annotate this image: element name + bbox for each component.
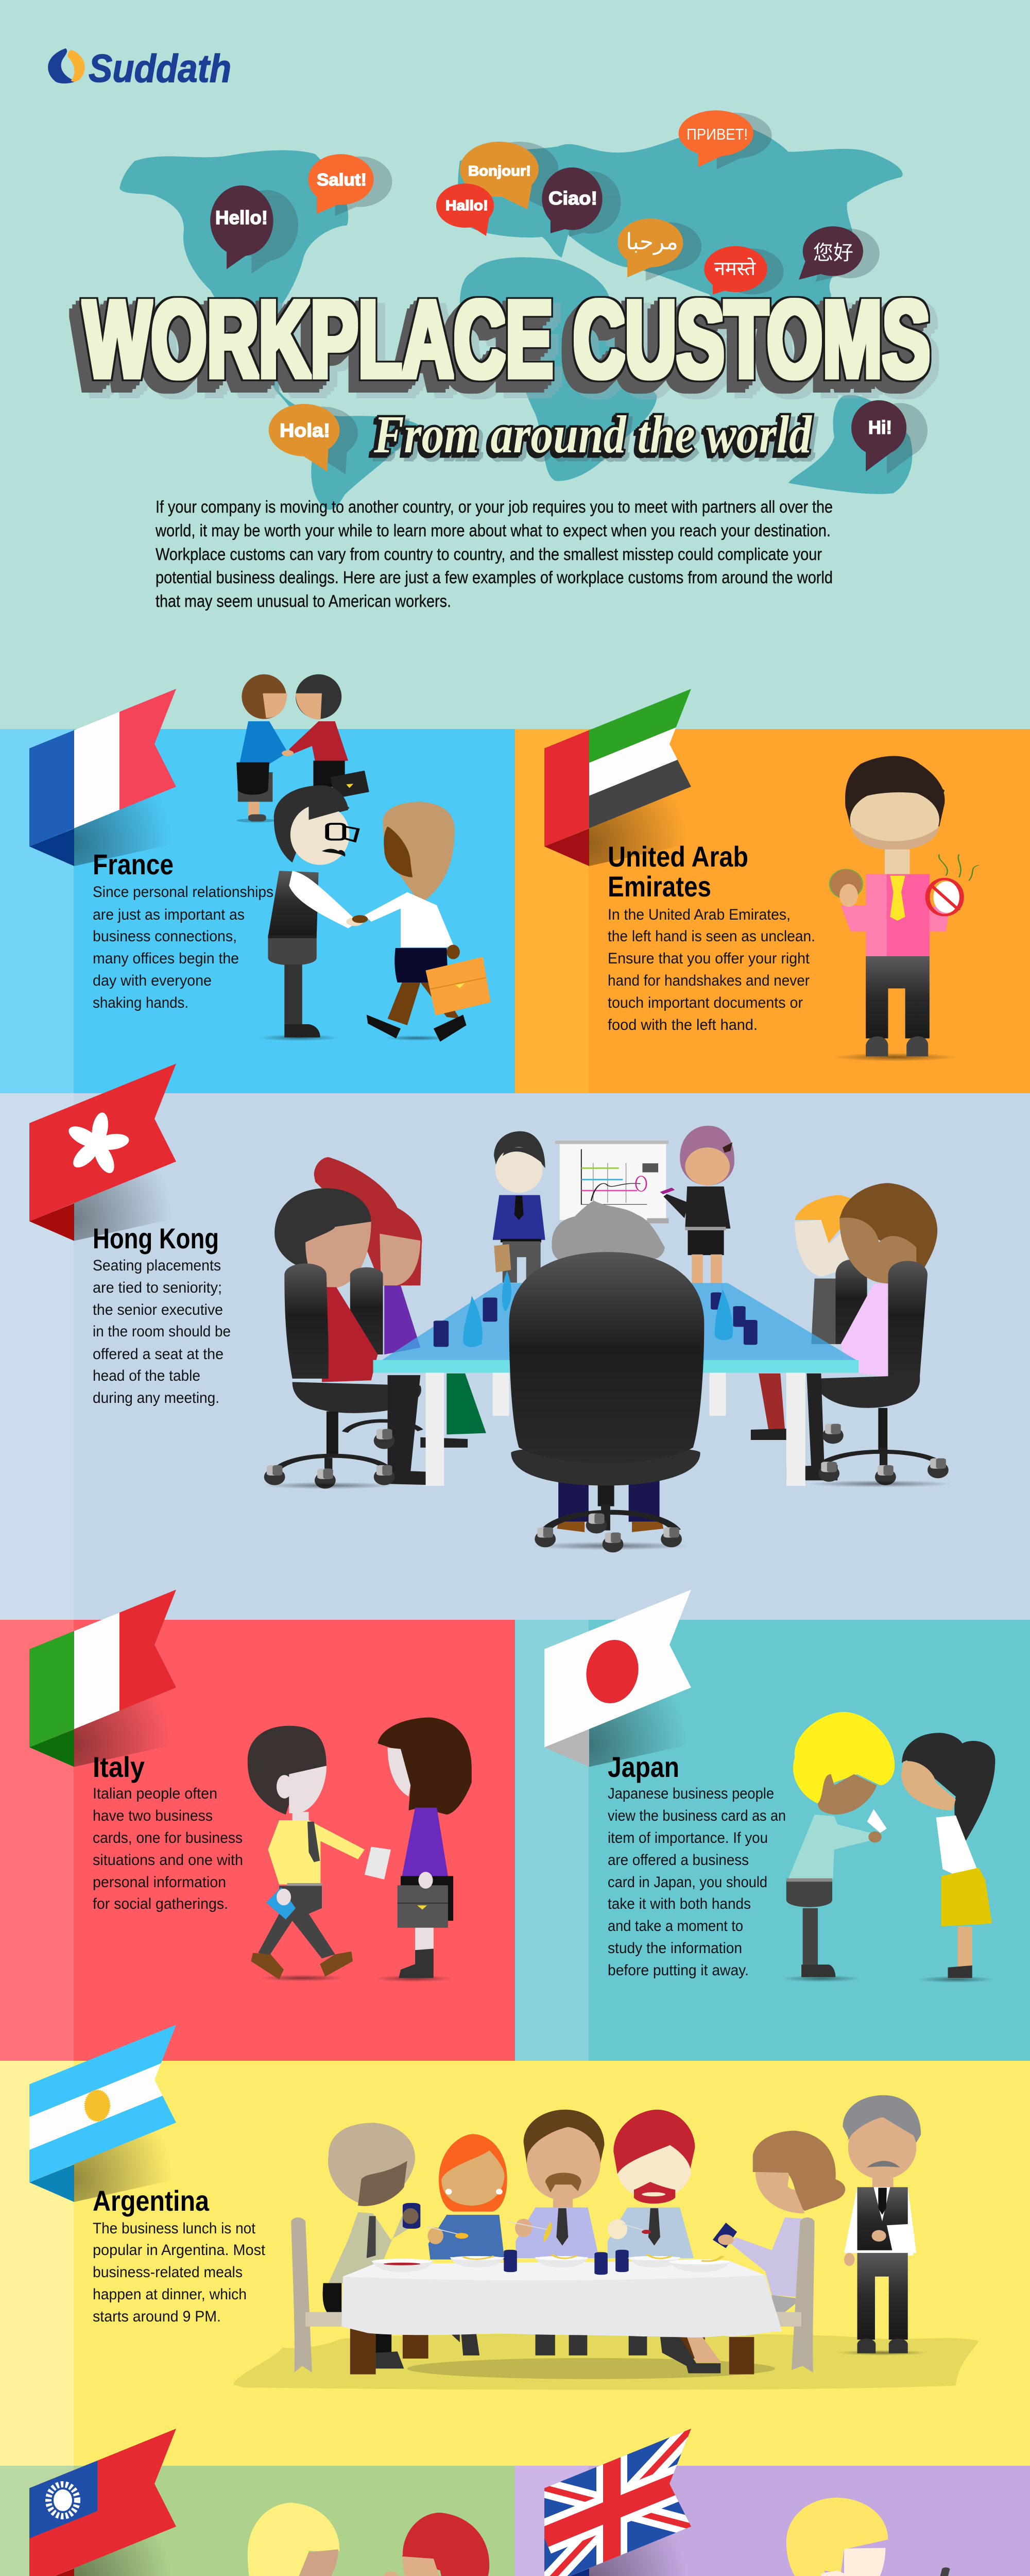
body text (93, 2220, 266, 2325)
bubble: Arabic: مرحبا (626, 229, 678, 255)
subtitle: From around the world (373, 405, 813, 464)
table (341, 2250, 782, 2375)
body text: touch important documents or (608, 994, 803, 1011)
panel: header (0, 0, 1030, 730)
body text: business connections, (93, 928, 237, 945)
head of table chair (509, 1252, 704, 1552)
bubble: Bonjour: Bonjour! (468, 163, 531, 179)
man giving card (248, 1726, 391, 1981)
body text: are just as important as (93, 906, 245, 923)
floor shadow (233, 2333, 978, 2390)
body text: personal information (93, 1874, 226, 1891)
bubble: Chinese (799, 226, 880, 282)
country name (608, 840, 748, 903)
figures: back couple (236, 674, 369, 822)
world map (119, 124, 912, 510)
red haired colleague (355, 2513, 489, 2576)
body text: Seating placements (93, 1257, 221, 1274)
panel: United Arab Emirates (515, 689, 1030, 1093)
body text (608, 906, 815, 1033)
body text: The business lunch is not (93, 2220, 256, 2237)
presenter woman (660, 1126, 734, 1284)
country name: Hong Kong (93, 1222, 219, 1255)
body text: before putting it away. (608, 1962, 749, 1979)
intro text: world, it may be worth your while to learn more about what to expect when you reach your destination. (155, 521, 831, 540)
diner four: red turban (608, 2110, 695, 2258)
bubble: Ciao (542, 167, 621, 237)
body text (608, 1785, 786, 1979)
body text (93, 1257, 231, 1406)
country name: Emirates (608, 870, 711, 903)
body text (93, 884, 273, 1011)
flag: Argentina (29, 2025, 176, 2202)
standing man (493, 1131, 545, 1283)
panel: Hong Kong (0, 1063, 1030, 1620)
body text: are tied to seniority; (93, 1279, 222, 1296)
figure: woman with orange case (352, 802, 491, 1042)
body text: cards, one for business (93, 1829, 243, 1846)
illustration: man at laptop (756, 2498, 946, 2576)
panel: France (0, 674, 515, 1093)
bubble: Hola (269, 404, 358, 474)
diner two: orange hair (427, 2134, 507, 2260)
flag: Japan (544, 1590, 691, 1767)
bubble: Hallo: Hallo! (445, 197, 488, 213)
bubble: Hindi (704, 246, 784, 294)
intro text: that may seem unusual to American workers. (156, 591, 451, 611)
diner one: curly grey hair (323, 2123, 420, 2318)
body text: Japanese business people (608, 1785, 774, 1802)
body text: Italian people often (93, 1785, 217, 1802)
body text: hand for handshakes and never (608, 972, 810, 989)
body text: happen at dinner, which (93, 2286, 247, 2303)
body text: are offered a business (608, 1852, 749, 1869)
illustration: handshake (236, 674, 491, 1042)
body text (93, 1785, 243, 1912)
body text: offered a seat at the (93, 1346, 224, 1363)
body text: Ensure that you offer your right (608, 950, 810, 967)
body text: In the United Arab Emirates, (608, 906, 791, 923)
bubble: Ciao: Ciao! (548, 188, 597, 209)
panel: Italy (0, 1590, 515, 2061)
left seated people (263, 1157, 486, 1489)
intro text: potential business dealings. Here are just a few examples of workplace customs from around the world (156, 568, 833, 587)
illustration: meeting (263, 1126, 952, 1552)
speech bubbles (210, 110, 928, 474)
blonde woman (210, 2503, 339, 2576)
bubble: Hi (851, 400, 928, 474)
body text: starts around 9 PM. (93, 2308, 221, 2325)
body text: day with everyone (93, 972, 212, 989)
table (373, 1271, 859, 1486)
body text: food with the left hand. (608, 1016, 758, 1033)
body text: view the business card as an (608, 1807, 786, 1824)
flag: France (29, 689, 176, 866)
body text: business-related meals (93, 2264, 243, 2281)
body text: popular in Argentina. Most (93, 2242, 266, 2259)
bubble: Privet (679, 110, 772, 170)
flag: UAE (544, 689, 691, 866)
illustration: gift giving (210, 2503, 489, 2576)
logo: Suddath: Suddath (89, 47, 231, 91)
intro text (155, 497, 833, 611)
illustration: business cards (248, 1718, 472, 1982)
body text: many offices begin the (93, 950, 239, 967)
body text: item of importance. If you (608, 1829, 768, 1846)
illustration: business dinner (233, 2095, 978, 2390)
country name: Argentina (93, 2184, 210, 2217)
bubble: Hello (210, 185, 298, 274)
gray haired executive (552, 1201, 665, 1260)
body text: the senior executive (93, 1301, 223, 1318)
panel: Japan (515, 1590, 1030, 2061)
woman with briefcase (374, 1718, 472, 1982)
right seated people (751, 1183, 952, 1487)
body text: for social gatherings. (93, 1895, 228, 1912)
country name: United Arab (608, 840, 748, 873)
bubble: Hindi: नमस्ते (714, 257, 756, 280)
body text: have two business (93, 1807, 213, 1824)
body text: study the information (608, 1940, 742, 1957)
blonde man reading card (782, 1712, 895, 1982)
bubble: Hallo (436, 183, 494, 236)
body text: situations and one with (93, 1852, 243, 1869)
bubble: Chinese: 您好 (813, 242, 853, 264)
panel: Taiwan (0, 2429, 515, 2576)
body text: in the room should be (93, 1323, 231, 1340)
diner five: with phone (713, 2131, 845, 2312)
country name: Italy (93, 1751, 145, 1783)
panel: United Kingdom (515, 2429, 1030, 2576)
country name: France (93, 848, 174, 880)
body text: head of the table (93, 1367, 200, 1384)
woman with ponytail (901, 1733, 995, 1983)
bubble: Hola: Hola! (280, 420, 330, 441)
country name: Japan (608, 1751, 679, 1783)
flag: Taiwan (29, 2429, 176, 2576)
intro text: If your company is moving to another country, or your job requires you to meet with partners all over the (156, 497, 833, 516)
bubble: Hi: Hi! (868, 417, 892, 438)
body text: the left hand is seen as unclean. (608, 928, 815, 945)
waiter (836, 2095, 928, 2355)
bubble: Salut: Salut! (317, 170, 367, 189)
bubble: Bonjour (460, 142, 558, 209)
panel: Argentina (0, 2025, 1030, 2466)
chairs (291, 2217, 815, 2372)
body text: card in Japan, you should (608, 1874, 767, 1891)
body text: shaking hands. (93, 994, 188, 1011)
flag: Italy (29, 1590, 176, 1767)
bubble: Arabic (617, 218, 701, 281)
whiteboard (555, 1141, 668, 1224)
flag: Hong Kong (29, 1063, 176, 1241)
figure: man with glasses (258, 785, 363, 1041)
body text: Since personal relationships (93, 884, 273, 901)
body text: during any meeting. (93, 1389, 219, 1406)
bubble: Hello: Hello! (215, 207, 268, 228)
body text: and take a moment to (608, 1918, 743, 1935)
flag: United Kingdom (544, 2429, 691, 2576)
illustration: business card exchange (782, 1712, 995, 1983)
body text: take it with both hands (608, 1895, 751, 1912)
bubble: Privet: ПРИВЕТ! (686, 125, 748, 143)
intro text: Workplace customs can vary from country to country, and the smallest misstep could complicate your (156, 545, 822, 564)
bubble: Salut (308, 154, 392, 216)
illustration: man with burger (830, 756, 978, 1061)
diner three: mustache (507, 2110, 604, 2258)
